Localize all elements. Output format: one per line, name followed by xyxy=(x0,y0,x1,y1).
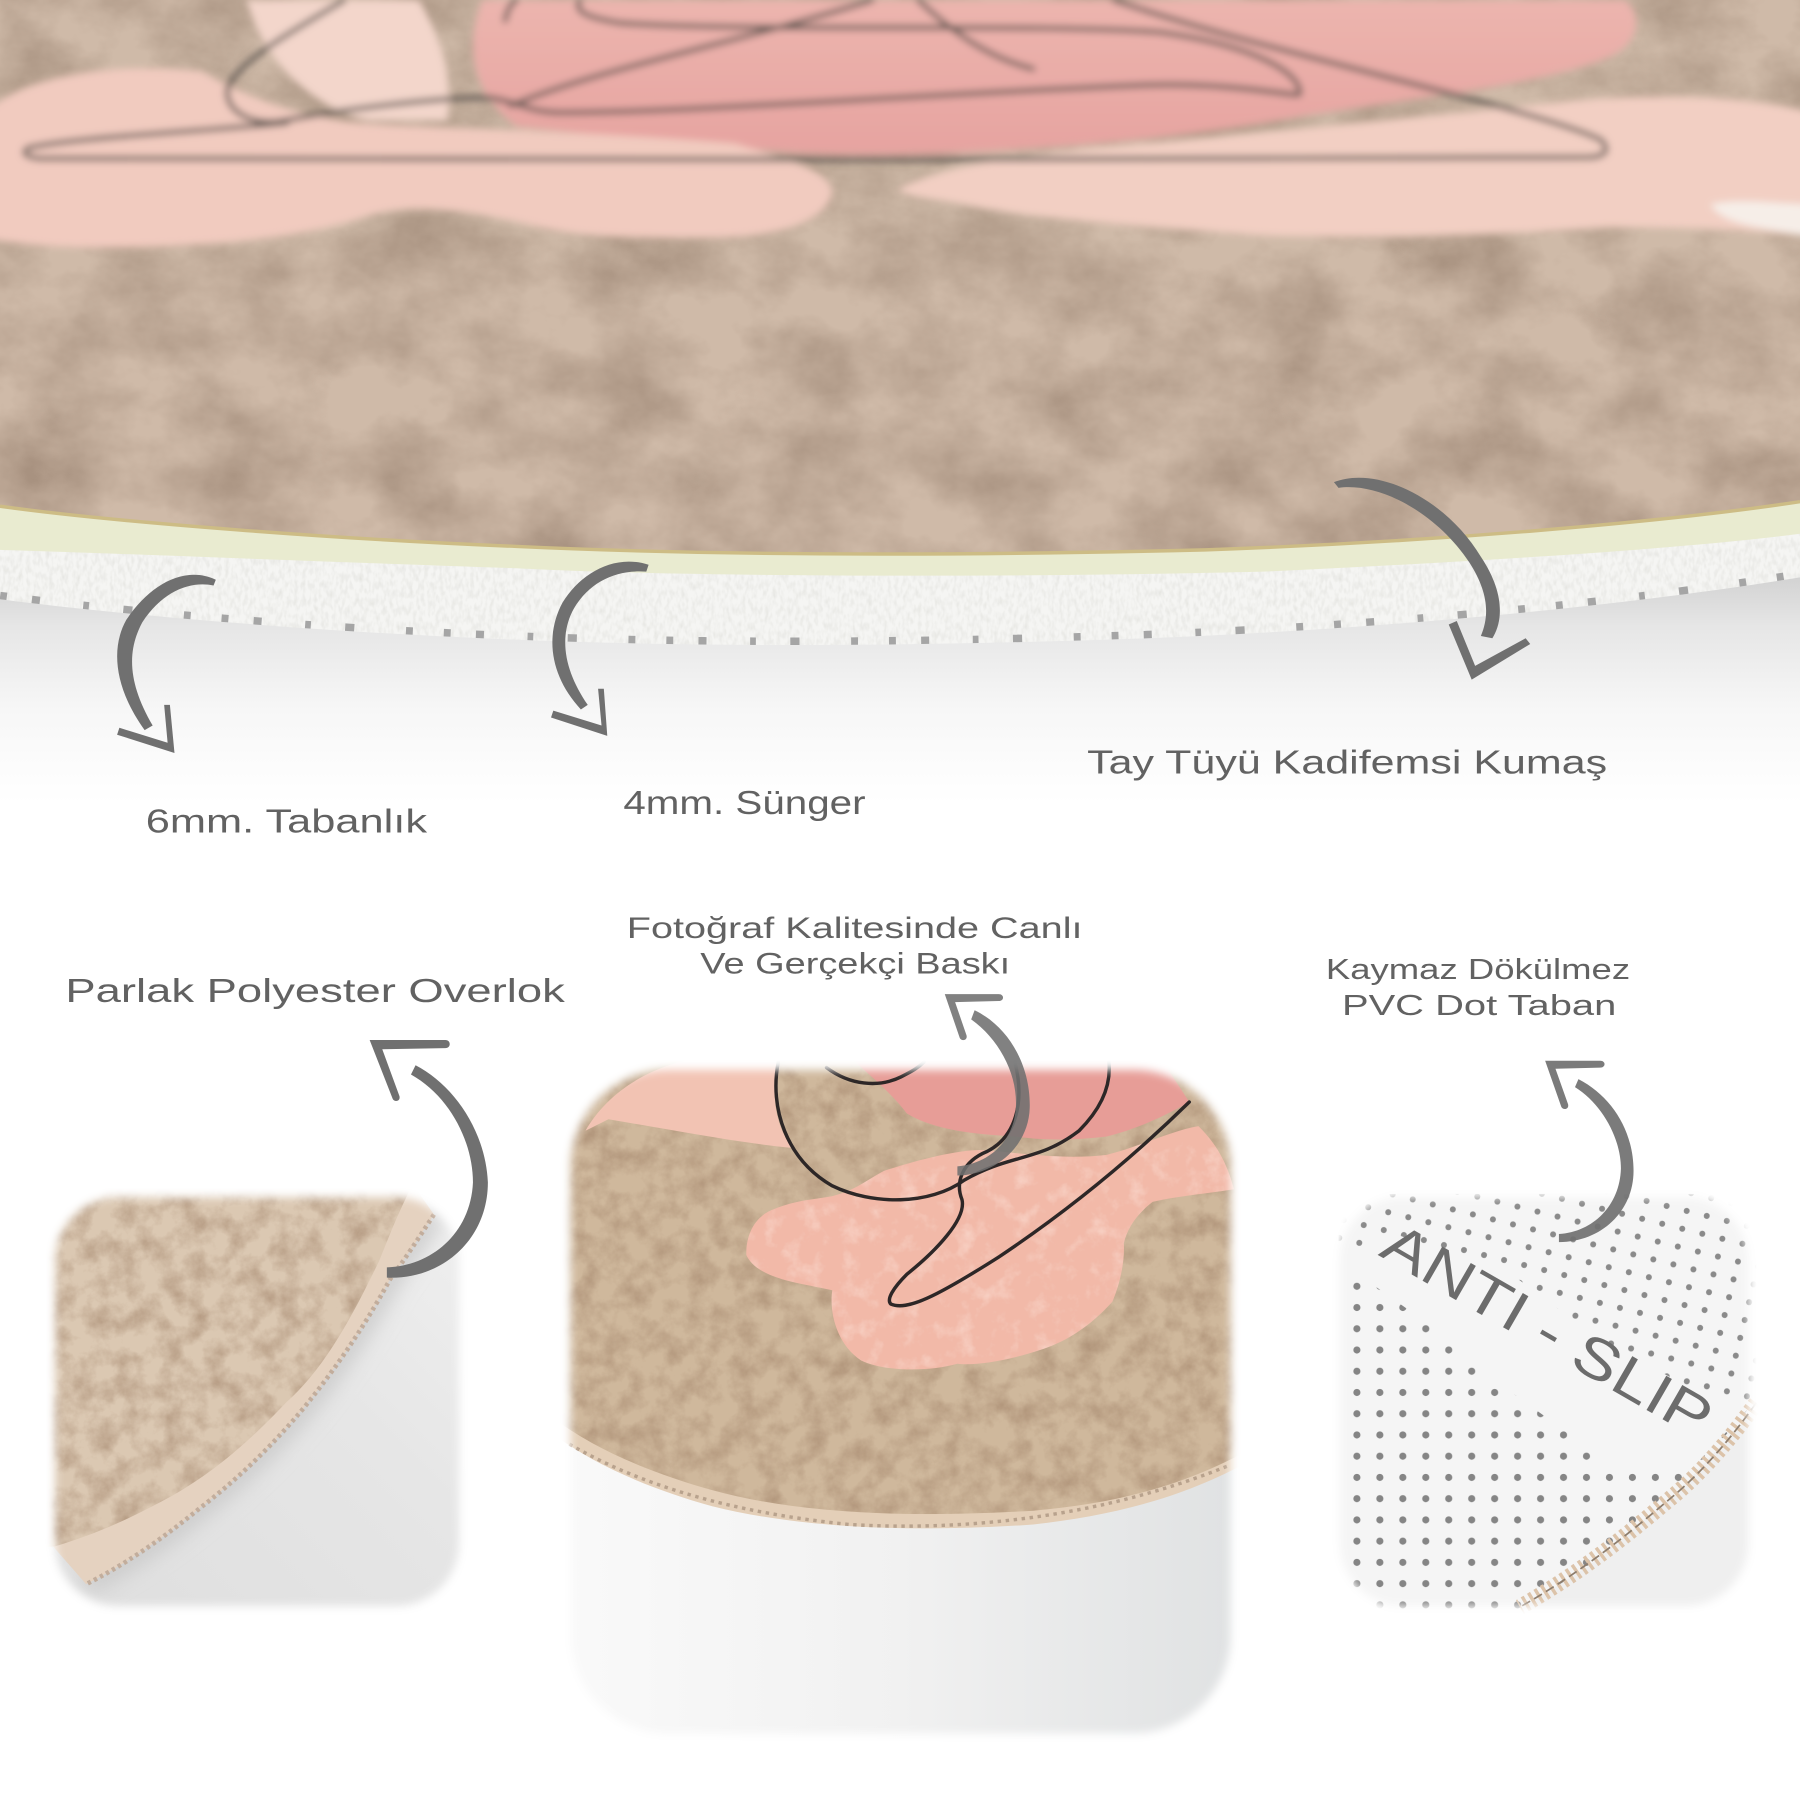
shape: pale upper pink xyxy=(247,0,449,121)
panel: close-up of round rug edge with layers xyxy=(0,0,1800,654)
shape: central pink with speckle xyxy=(735,1119,1240,1378)
shape: dark pink xyxy=(473,0,1636,154)
floor shadow under rug xyxy=(0,568,1800,804)
line drawing xyxy=(776,1062,1189,1306)
layer: printed velvet fabric xyxy=(0,0,1800,562)
label: polyester overlock: Parlak Polyester Overlok xyxy=(65,973,565,1010)
dots: upper grid xyxy=(1338,1194,1754,1400)
anti-slip imprint: ANTI - SLIP xyxy=(1371,1211,1723,1451)
white worn edge xyxy=(1710,201,1800,236)
yellow seam line xyxy=(0,502,1800,554)
shadow along rim xyxy=(86,1215,434,1584)
stitched overlock edge xyxy=(1520,1403,1756,1607)
rim xyxy=(46,1188,434,1584)
panel: photo quality print detail xyxy=(551,1056,1251,1756)
label: photo print: Fotoğraf Kalitesinde Canlı xyxy=(627,912,1083,945)
rim xyxy=(566,1428,1234,1528)
beige fabric with texture xyxy=(46,1188,425,1555)
label: sponge: 4mm. Sünger xyxy=(623,785,866,822)
arrow: polyester overlock xyxy=(370,1040,488,1278)
layer: white sole xyxy=(0,534,1800,645)
beige fabric with texture xyxy=(551,1056,1251,1527)
layer: foam sponge xyxy=(0,504,1800,576)
panel: anti-slip PVC dot backing xyxy=(1338,1194,1755,1612)
white backing xyxy=(1344,1202,1745,1603)
arrow: sponge xyxy=(551,562,649,736)
arrow: photo print xyxy=(945,994,1030,1176)
panel: polyester overlock detail xyxy=(46,1188,471,1619)
floor corner shadow xyxy=(1520,1407,1756,1609)
shape: dark pink xyxy=(862,1066,1188,1140)
line drawing xyxy=(25,0,1606,160)
arrow: fabric xyxy=(1334,478,1530,680)
label: PVC dot backing: Kaymaz Dökülmez xyxy=(1326,954,1630,986)
shape: pale top pink xyxy=(586,1066,791,1148)
label: PVC dot backing: PVC Dot Taban xyxy=(1342,990,1616,1022)
dots: lower grid xyxy=(1353,1282,1747,1608)
artwork: pink shapes and line drawing, out of focus xyxy=(0,0,1800,248)
floor xyxy=(669,1470,1234,1736)
arrow: PVC dot backing xyxy=(1545,1061,1634,1242)
arrow: sole xyxy=(117,575,216,753)
shape: light pink right xyxy=(898,97,1800,237)
label: fabric: Tay Tüyü Kadifemsi Kumaş xyxy=(1087,745,1607,782)
label: photo print: Ve Gerçekçi Baskı xyxy=(700,947,1010,980)
floor shadow xyxy=(52,1212,461,1609)
label: photo print xyxy=(627,912,1083,980)
shape: light pink left xyxy=(0,68,832,248)
label: PVC dot backing xyxy=(1326,954,1630,1022)
label: sole: 6mm. Tabanlık xyxy=(146,803,428,840)
